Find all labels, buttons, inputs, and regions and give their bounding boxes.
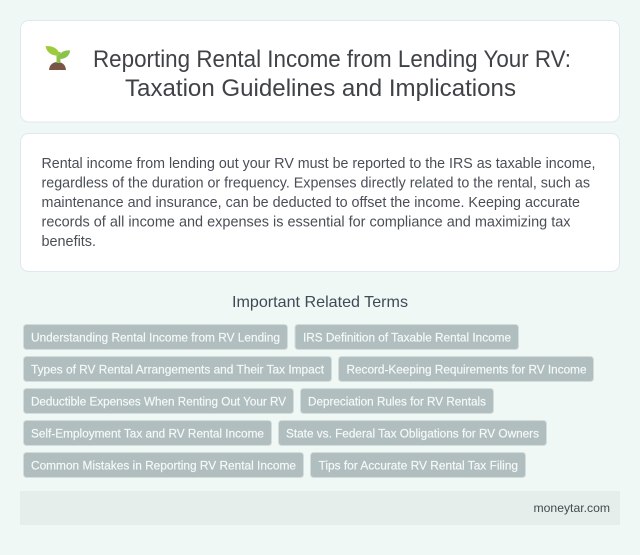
tag: Self-Employment Tax and RV Rental Income: [31, 426, 264, 440]
tag: State vs. Federal Tax Obligations for RV Owners: [286, 426, 539, 440]
tag: [310, 452, 526, 478]
tag: [295, 324, 518, 350]
tag: Record-Keeping Requirements for RV Income: [346, 362, 587, 376]
tag: [338, 356, 594, 382]
tag: Tips for Accurate RV Rental Tax Filing: [318, 458, 518, 472]
tag: Deductible Expenses When Renting Out Your RV: [31, 394, 287, 408]
tag: IRS Definition of Taxable Rental Income: [303, 330, 511, 344]
summary text: regardless of the duration or frequency. Expenses directly related to the rental, such as: [42, 176, 590, 192]
footer: [20, 491, 620, 525]
tag: [24, 356, 332, 382]
heading: related terms: Important Related Terms: [232, 294, 408, 311]
summary text: Rental income from lending out your RV must be reported to the IRS as taxable income,: [42, 156, 596, 172]
tag: [300, 388, 494, 414]
tag: [24, 452, 304, 478]
icon: sprout: [46, 46, 70, 70]
tag: Understanding Rental Income from RV Lending: [31, 330, 280, 344]
summary text: benefits.: [42, 234, 96, 250]
summary text: [42, 156, 596, 250]
tag: Types of RV Rental Arrangements and Their Tax Impact: [31, 362, 325, 376]
tag: [24, 388, 294, 414]
tag: [24, 324, 288, 350]
tag: [278, 420, 546, 446]
panel: title card: [20, 20, 620, 122]
title: Reporting Rental Income from Lending Your RV:: [93, 46, 571, 73]
panel: summary card: [20, 134, 620, 272]
tag: Depreciation Rules for RV Rentals: [308, 394, 486, 408]
footer source text: moneytar.com: [534, 501, 610, 515]
title: Taxation Guidelines and Implications: [125, 75, 516, 102]
title: [93, 46, 571, 102]
tag: [24, 420, 272, 446]
tag: Common Mistakes in Reporting RV Rental Income: [31, 458, 296, 472]
summary text: maintenance and insurance, can be deducted to offset the income. Keeping accurate: [42, 195, 580, 211]
summary text: records of all income and expenses is essential for compliance and maximizing tax: [42, 214, 571, 230]
related terms tags: [24, 324, 594, 478]
